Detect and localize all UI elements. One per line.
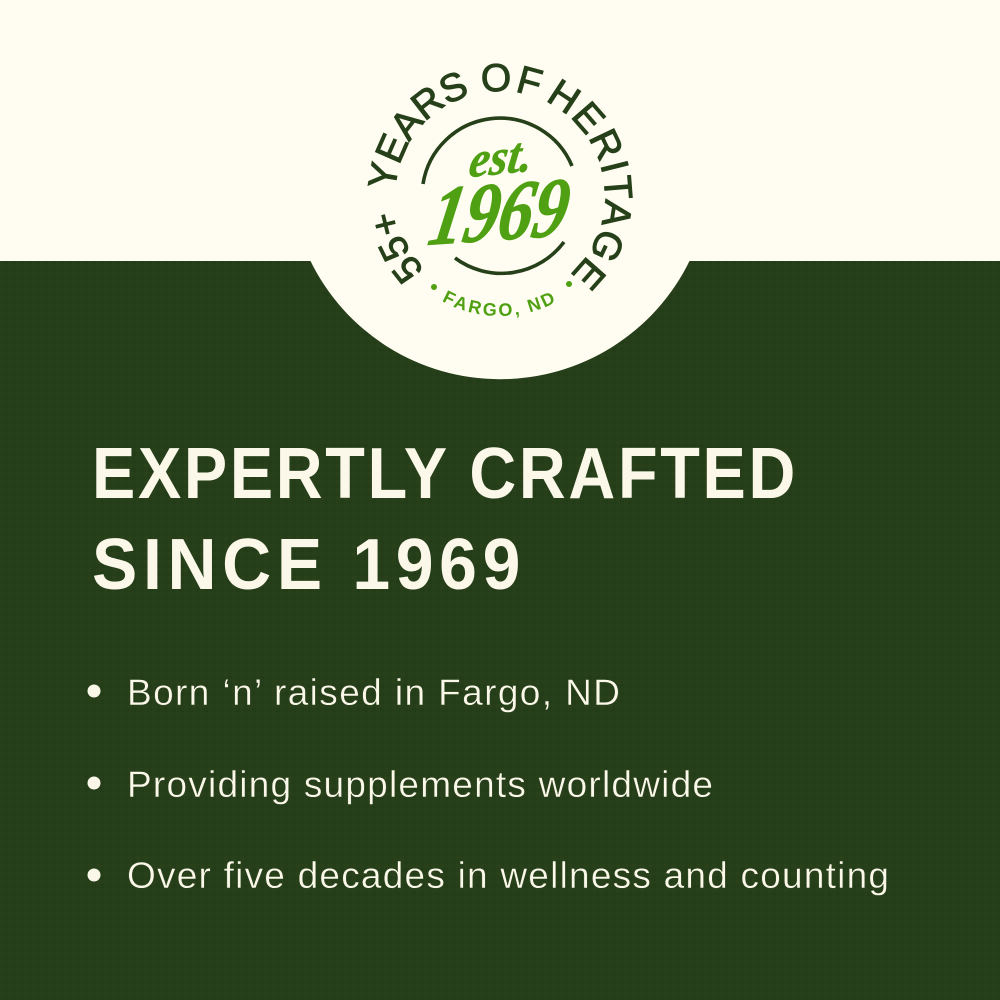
emblem ring text: [368, 63, 633, 292]
emblem arcs: [423, 118, 572, 273]
heading: SINCE 1969: [92, 525, 526, 605]
heading: [92, 434, 798, 605]
bullet 1: Born ‘n’ raised in Fargo, ND: [127, 672, 620, 713]
heading: EXPERTLY CRAFTED: [92, 434, 798, 514]
emblem: est. 1969 badge: [368, 63, 633, 318]
cream semicircle notch: [310, 260, 690, 379]
emblem 1969 script: 1969: [423, 160, 577, 264]
cream top background: [0, 0, 1000, 261]
emblem est. script: est.: [466, 125, 537, 188]
emblem ring text: HERITAGE: [547, 78, 633, 292]
bullet list: [88, 672, 889, 896]
emblem Fargo, ND text: FARGO, ND: [442, 290, 554, 318]
dark green textured panel: [0, 261, 1000, 1000]
emblem ring text: OF: [482, 63, 544, 94]
emblem ring text: 55+: [375, 214, 422, 285]
emblem dots: [431, 281, 572, 290]
bullet 2: Providing supplements worldwide: [127, 764, 713, 805]
bullet 3: Over five decades in wellness and counting: [127, 855, 889, 896]
emblem ring text: YEARS: [368, 72, 467, 186]
